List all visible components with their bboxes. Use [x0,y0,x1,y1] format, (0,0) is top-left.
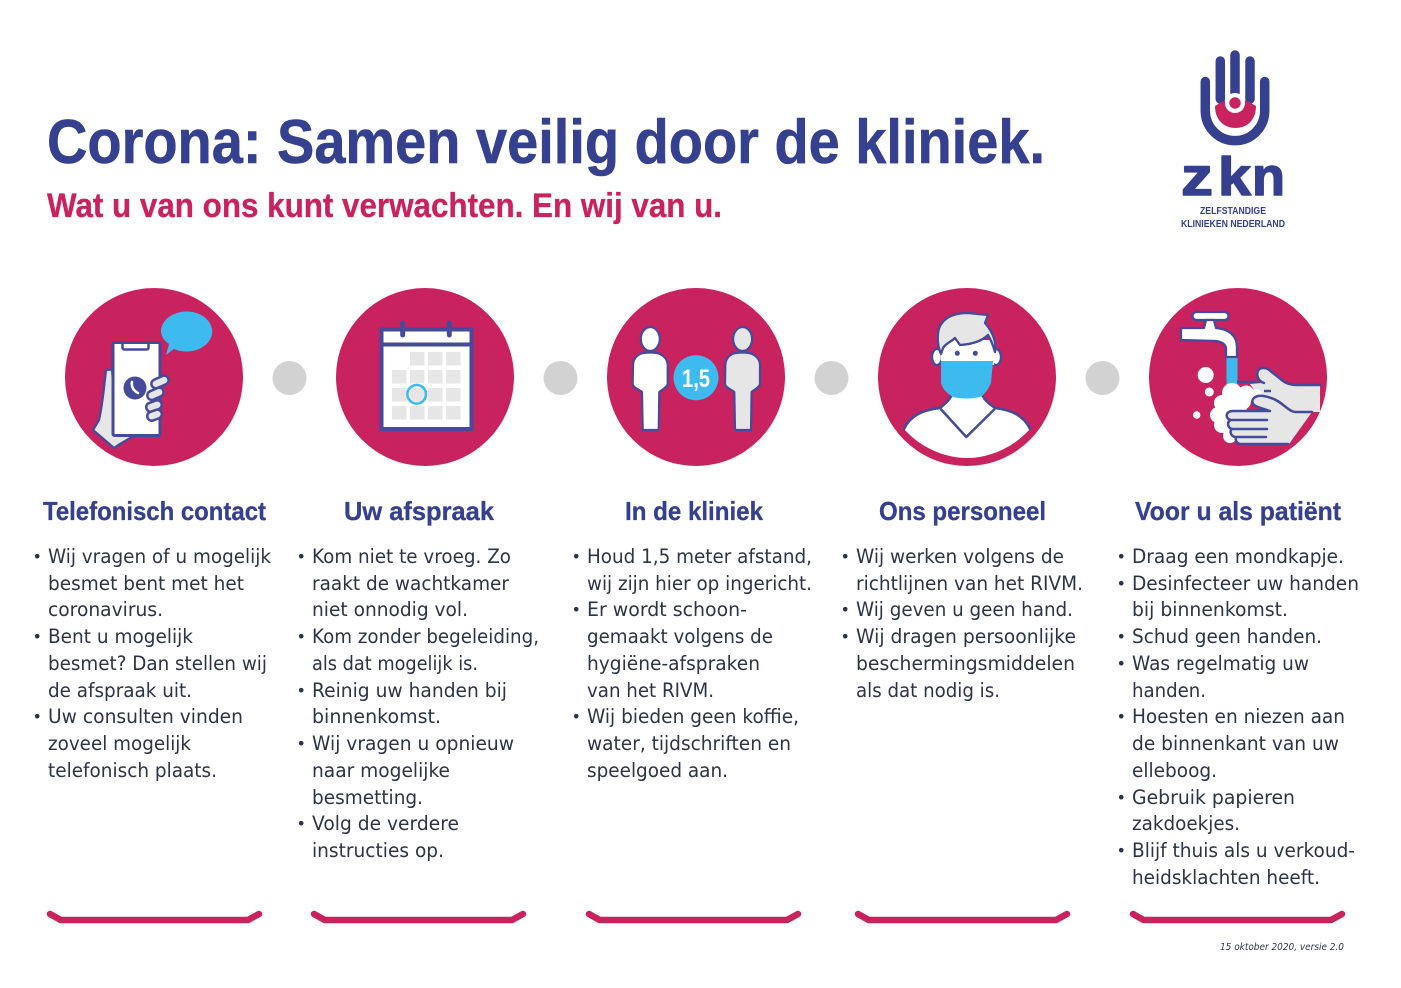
heading: Voor u als patiënt [1135,496,1341,526]
bullet list: • [32,547,42,566]
bullet list: water, tijdschriften en [587,732,791,755]
bullet list: • [840,547,850,566]
logo wordmark: z [1181,147,1213,207]
bullet list: • [32,627,42,646]
bullet list: • [1116,707,1126,726]
heading: Uw afspraak [344,496,495,526]
bullet list: Uw consulten vinden [48,705,243,728]
bullet list: • [32,707,42,726]
bullet list: Reinig uw handen bij [312,679,507,702]
bracket [589,914,798,920]
bullet list: • [572,600,581,619]
bullet list: zakdoekjes. [1132,812,1240,835]
bullet list: Houd 1,5 meter afstand, [587,545,812,568]
bullet list: Wij werken volgens de [856,545,1064,568]
bullet list: • [1116,788,1126,807]
bullet list: bij binnenkomst. [1132,598,1288,621]
bullet list: • [840,600,850,619]
bullet list: Er wordt schoon- [587,598,747,621]
bullet list: Wij bieden geen koffie, [587,705,799,728]
bullet list: beschermingsmiddelen [856,652,1075,675]
logo wordmark: n [1252,147,1285,207]
logo tagline line 2: KLINIEKEN NEDERLAND [1181,219,1285,230]
footnote date: 15 oktober 2020, versie 2.0 [1220,942,1344,953]
panel: Uw afspraak [296,496,539,920]
bullet list [32,545,272,782]
logo wordmark: k [1218,147,1252,207]
icon: calendar circle [336,288,514,466]
bullet list: handen. [1132,679,1206,702]
bullet list: hygiëne-afspraken [587,652,760,675]
bullet list: Schud geen handen. [1132,625,1322,648]
bullet list: • [296,814,306,833]
bullet list: • [296,681,306,700]
bullet list: richtlijnen van het RIVM. [856,572,1083,595]
bullet list: Wij geven u geen hand. [856,598,1073,621]
bullet list: Desinfecteer uw handen [1132,572,1359,595]
bracket [858,914,1067,920]
bullet list: • [840,627,850,646]
bullet list: • [296,627,306,646]
bullet list: • [1116,547,1126,566]
logo: zkn [1181,55,1285,230]
bullet list: Volg de verdere [312,812,459,835]
connector dot [814,361,848,395]
bullet list: Kom zonder begeleiding, [312,625,539,648]
icon: distance circle [607,288,785,466]
bullet list: wij zijn hier op ingericht. [587,572,812,595]
bullet list: Bent u mogelijk [48,625,194,648]
connector dot [1086,361,1120,395]
logo wordmark [1181,147,1285,207]
bullet list: • [1116,841,1126,860]
bullet list: heidsklachten heeft. [1132,866,1320,889]
bracket [1133,914,1342,920]
bullet list: • [296,547,306,566]
bullet list: instructies op. [312,839,444,862]
bullet list [572,545,812,782]
bullet list: als dat nodig is. [856,679,1000,702]
icon: hand with eye [1205,55,1265,141]
bullet list: Gebruik papieren [1132,786,1295,809]
bracket [314,914,523,920]
bullet list: coronavirus. [48,598,163,621]
connector dot [272,361,306,395]
bullet list: • [572,707,581,726]
panel: Ons personeel [840,496,1083,920]
bullet list [296,545,539,862]
bullet list: besmetting. [312,786,423,809]
heading: Ons personeel [879,496,1046,526]
bullet list: speelgoed aan. [587,759,728,782]
bullet list [840,545,1083,702]
bullet list: niet onnodig vol. [312,598,468,621]
bullet list: besmet bent met het [48,572,244,595]
bullet list: de binnenkant van uw [1132,732,1339,755]
bullet list: Was regelmatig uw [1132,652,1309,675]
bullet list: • [572,547,581,566]
bullet list [1116,545,1359,889]
bullet list: Kom niet te vroeg. Zo [312,545,511,568]
panel: Voor u als patiënt [1116,496,1359,920]
icon: hand washing circle [1149,288,1327,466]
bullet list: Blijf thuis als u verkoud- [1132,839,1355,862]
bullet list: van het RIVM. [587,679,714,702]
bullet list: de afspraak uit. [48,679,192,702]
icon: phone call circle [65,288,243,466]
bullet list: Wij vragen u opnieuw [312,732,514,755]
panel: In de kliniek [572,496,812,920]
bullet list: Wij dragen persoonlijke [856,625,1076,648]
bullet list: telefonisch plaats. [48,759,217,782]
bullet list: gemaakt volgens de [587,625,773,648]
bracket [50,914,259,920]
bullet list: zoveel mogelijk [48,732,192,755]
bullet list: Wij vragen of u mogelijk [48,545,272,568]
title: Corona: Samen veilig door de kliniek. [47,108,1045,177]
heading: Telefonisch contact [43,496,266,526]
heading: In de kliniek [625,496,763,526]
bullet list: raakt de wachtkamer [312,572,510,595]
bullet list: Draag een mondkapje. [1132,545,1344,568]
icon: staff with mask circle [878,288,1056,466]
distance label: 1,5 [682,365,710,393]
bullet list: binnenkomst. [312,705,441,728]
bullet list: elleboog. [1132,759,1217,782]
bullet list: • [1116,574,1126,593]
subtitle: Wat u van ons kunt verwachten. En wij van u. [47,187,722,225]
logo tagline: ZELFSTANDIGE [1200,206,1266,217]
bullet list: als dat mogelijk is. [312,652,478,675]
bullet list: Hoesten en niezen aan [1132,705,1345,728]
bullet list: naar mogelijke [312,759,450,782]
bullet list: • [1116,654,1126,673]
panel: Telefonisch contact [32,496,272,920]
bullet list: besmet? Dan stellen wij [48,652,267,675]
bullet list: • [1116,627,1126,646]
connector dot [544,361,578,395]
bullet list: • [296,734,306,753]
